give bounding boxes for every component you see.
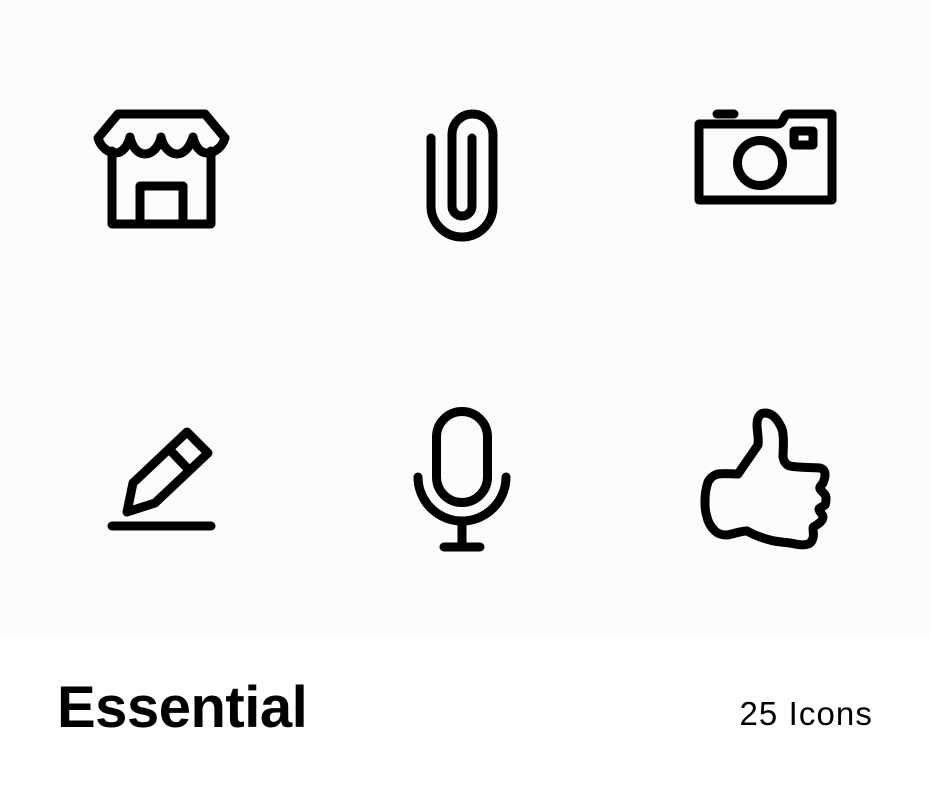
icon: paperclip bbox=[431, 114, 493, 237]
icon: storefront bbox=[98, 114, 225, 224]
icon: microphone bbox=[418, 412, 506, 547]
icon count: 25 Icons bbox=[739, 695, 873, 732]
icon: thumbs up bbox=[705, 413, 826, 545]
icon: pencil on a line bbox=[112, 432, 211, 526]
icon: camera bbox=[699, 114, 832, 200]
title: Essential bbox=[57, 675, 307, 740]
